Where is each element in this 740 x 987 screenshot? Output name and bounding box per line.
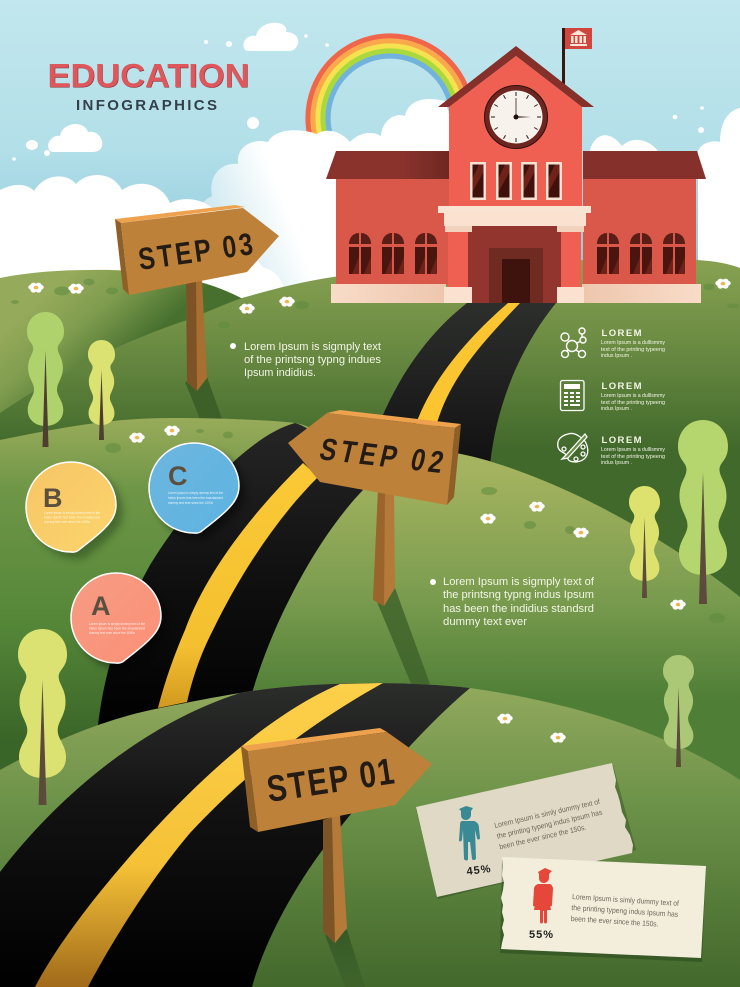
paper text: the printing typeng indus Ipsum has	[571, 903, 679, 919]
item: lorem 2: LOREM	[602, 381, 642, 392]
step 03 signpost	[115, 205, 279, 391]
flowers	[28, 279, 731, 743]
item: lorem 1	[601, 328, 666, 359]
tree: left upper small	[88, 340, 115, 440]
flag	[562, 28, 592, 84]
tree: right medium	[629, 486, 660, 598]
bullet text: step 02	[430, 576, 595, 628]
paper text: the printing typeng indus Ipsum has	[496, 808, 603, 841]
paper note: 45%	[416, 763, 636, 899]
road centre line: middle section	[158, 463, 318, 708]
bullet text: step 02: the printsng typng indus Ipsum	[443, 589, 594, 601]
sticker A: indus Ipsum has been the insedardard	[89, 626, 145, 630]
school building	[326, 28, 706, 303]
tree: right large	[678, 420, 728, 604]
entrance and portico	[438, 206, 591, 303]
pole shadow: step 02	[377, 588, 430, 686]
item: lorem 2: Lorem Ipsum is a dulllsmmy	[601, 393, 666, 399]
hill: front	[0, 683, 740, 987]
hill: far left	[0, 270, 245, 460]
stat: 45%: 45%	[466, 863, 491, 878]
bullet text: step 03	[230, 341, 381, 379]
sticker C: indus Ipsum has been the insedardard	[168, 496, 223, 500]
rainbow	[308, 36, 472, 200]
sky background	[0, 0, 740, 300]
sticker A	[71, 573, 167, 669]
bullet text: step 02: Lorem Ipsum is sigmply text of	[443, 576, 595, 588]
stat: 55%: 55%	[529, 929, 553, 941]
clouds behind the school	[0, 99, 740, 319]
item: lorem 1: LOREM	[602, 328, 642, 339]
hill: middle right	[100, 453, 740, 800]
title	[48, 57, 250, 114]
paper note: 55%	[500, 857, 706, 962]
grass patches	[11, 278, 739, 623]
sticker B: dummy text ever since the 1000s	[44, 520, 90, 524]
step 01 signpost	[241, 728, 432, 987]
tree: left upper large	[27, 312, 64, 447]
step 02 signpost: STEP 02	[316, 431, 447, 479]
step 01 signpost: STEP 01	[264, 751, 397, 811]
item: lorem 3: indus Ipsum .	[601, 460, 632, 466]
sticker C: C	[168, 461, 188, 491]
item: lorem 3: LOREM	[602, 435, 642, 446]
item: lorem 1: Lorem Ipsum is a dulllsmmy	[601, 340, 666, 346]
tree: right lower	[663, 655, 694, 767]
sticker B: indus Ipsum has been the insedardard	[44, 516, 100, 520]
left wing	[326, 151, 449, 303]
sticker B	[26, 462, 123, 559]
hill: back, behind school	[0, 260, 740, 640]
hill: middle left	[0, 418, 365, 780]
sticker A: dummy text ever since the 1000s	[89, 631, 135, 635]
title: EDUCATION	[48, 58, 250, 94]
bullet text: step 02: dummy text ever	[443, 616, 527, 628]
sticker A: A	[91, 591, 110, 621]
icon: male graduate	[459, 806, 480, 860]
road: middle section	[98, 423, 363, 730]
paper text: Lorem Ipsum is simly dummy text of	[572, 892, 680, 908]
icon: molecule	[561, 328, 586, 358]
paper text	[570, 892, 680, 930]
list: icon items	[558, 328, 666, 466]
road centre line: front section	[35, 683, 383, 987]
right wing	[582, 151, 706, 303]
icon: female graduate	[533, 868, 553, 924]
road: top section to school	[365, 303, 556, 465]
bullet text: step 03: Ipsum indidius.	[244, 367, 316, 379]
pole shadow: step 03	[185, 377, 222, 419]
step 02 signpost	[288, 410, 461, 606]
tree: left lower	[18, 629, 67, 805]
sticker C: dummy text ever since the 1000s	[168, 501, 213, 505]
step 03 signpost: STEP 03	[136, 227, 255, 277]
paper text: been the ever since the 150s.	[498, 823, 587, 851]
paper text	[493, 797, 606, 851]
bullet text: step 02: has been the indidius standsrd	[443, 603, 594, 615]
clock	[484, 86, 548, 148]
item: lorem 1: text of the printing typeeng	[601, 347, 665, 353]
paper text: Lorem Ipsum is simly dummy text of	[493, 797, 601, 830]
subtitle: INFOGRAPHICS	[76, 97, 217, 114]
road centre line: top section	[414, 303, 520, 430]
item: lorem 2	[601, 381, 666, 412]
item: lorem 2: text of the printing typeeng	[601, 400, 665, 406]
item: lorem 1: indus Ipsum .	[601, 353, 632, 359]
title: EDUCATION	[48, 57, 250, 94]
icon: calculator	[560, 380, 584, 410]
sticker B: B	[43, 483, 62, 513]
item: lorem 2: indus Ipsum .	[601, 406, 632, 412]
clock tower	[438, 46, 594, 207]
bullet text: step 03: of the printsng typng indues	[244, 354, 381, 366]
sticker A: Lorem Ipsum is simply dummy text of the	[89, 622, 145, 626]
sticker B: Lorem Ipsum is simply dummy text of the	[44, 511, 100, 515]
sticker C	[149, 443, 245, 539]
icon: paint palette	[558, 433, 588, 462]
small clouds and dots	[12, 23, 704, 161]
sticker C: Lorem Ipsum is simply dummy text of the	[168, 491, 223, 495]
item: lorem 3: Lorem Ipsum is a dulllsmmy	[601, 447, 666, 453]
item: lorem 3	[601, 435, 666, 466]
paper text: been the ever since the 150s.	[570, 914, 659, 929]
bullet text: step 03: Lorem Ipsum is sigmply text	[244, 341, 381, 353]
item: lorem 3: text of the printing typeeng	[601, 454, 665, 460]
road: front section	[0, 683, 470, 987]
